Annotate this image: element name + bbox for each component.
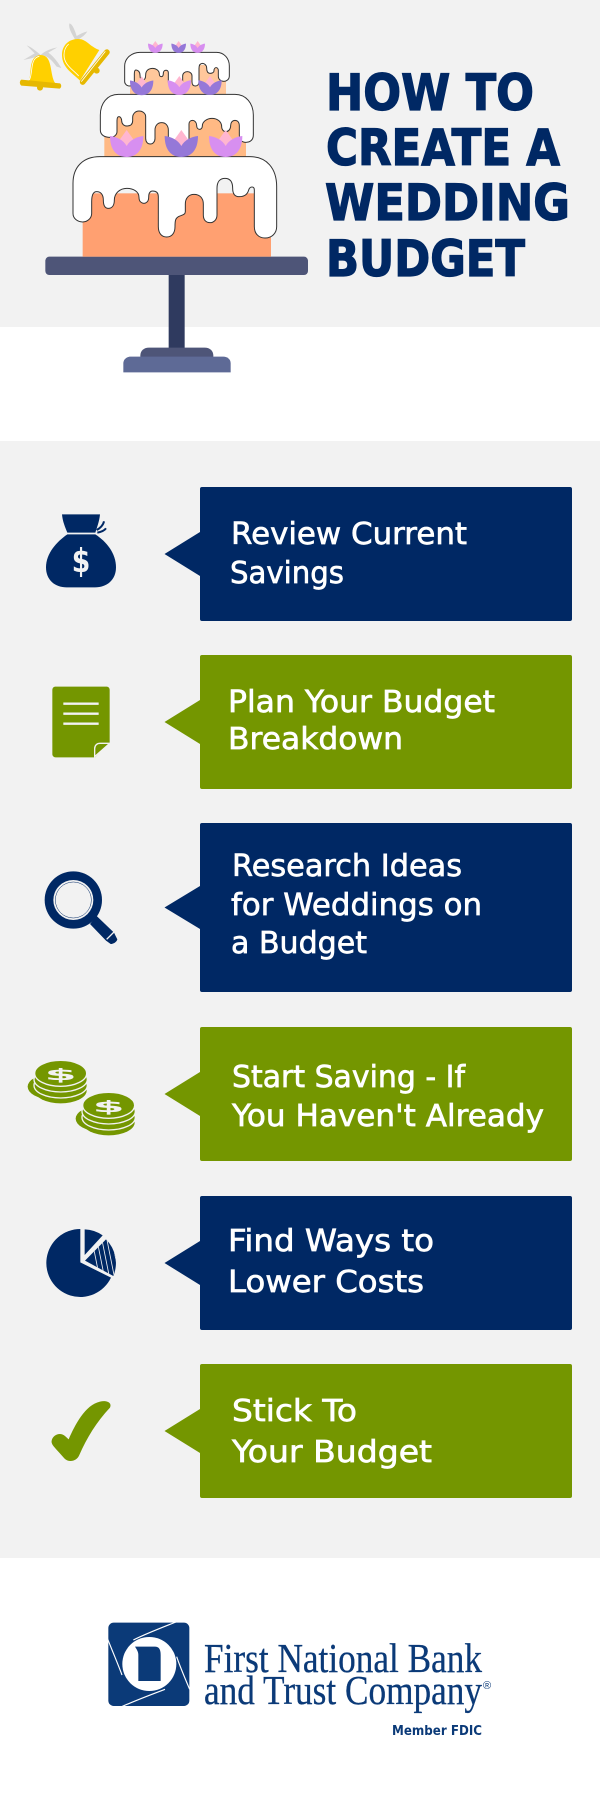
- callout text: [228, 685, 495, 757]
- flowers: bottom row: [110, 130, 242, 157]
- callout text: Stick To: [232, 1394, 357, 1429]
- coin stack 2: $: [93, 1098, 125, 1116]
- member FDIC note: Member FDIC: [392, 1724, 482, 1739]
- callout text: for Weddings on: [231, 888, 482, 923]
- panel: steps background: [0, 441, 600, 1558]
- callout text: Plan Your Budget: [228, 685, 495, 720]
- logo wordmark: [204, 1635, 491, 1713]
- callout box: [164, 1027, 572, 1161]
- icon: magnifying glass: [45, 871, 117, 944]
- logo mark: [107, 1622, 190, 1707]
- callout text: a Budget: [231, 926, 367, 961]
- logo wordmark: ®: [483, 1680, 491, 1692]
- illustration: wedding cake on stand with bells: [20, 23, 308, 372]
- step 5: find ways to lower costs: [164, 1196, 572, 1330]
- panel: header background: [0, 0, 600, 327]
- icon: document: [52, 687, 110, 757]
- step 3: research ideas: [164, 823, 572, 992]
- logo wordmark: First National Bank: [204, 1635, 482, 1681]
- icon: right bell: [62, 23, 111, 86]
- cake stand: [45, 257, 308, 372]
- cake tier: middle: [100, 94, 253, 157]
- callout box: [164, 823, 572, 992]
- title: HOW TO: [326, 64, 534, 122]
- callout box: [164, 487, 572, 621]
- icon: money bag: [46, 514, 116, 587]
- callout text: Your Budget: [231, 1435, 432, 1470]
- step 1: review current savings: [164, 487, 572, 621]
- callout text: [230, 517, 467, 591]
- title: WEDDING: [325, 174, 570, 232]
- cake tier: bottom: [73, 157, 277, 257]
- title: BUDGET: [326, 230, 525, 288]
- callout text: [231, 849, 482, 961]
- step 4: start saving: [164, 1027, 572, 1161]
- callout box: [164, 655, 572, 789]
- callout text: Find Ways to: [228, 1224, 434, 1259]
- title: [325, 64, 570, 288]
- callout text: [228, 1224, 434, 1300]
- callout text: Review Current: [231, 517, 467, 552]
- flowers: middle row: [130, 76, 222, 95]
- callout box: [164, 1196, 572, 1330]
- icon: check mark: [52, 1401, 111, 1461]
- callout text: Savings: [230, 556, 344, 591]
- icon: left bell: [20, 45, 61, 91]
- flowers: top row: [148, 41, 205, 53]
- icon: pie chart: [46, 1229, 120, 1297]
- logo: First National Bank and Trust Company: [107, 1622, 190, 1707]
- callout text: [231, 1394, 432, 1470]
- callout text: Research Ideas: [232, 849, 462, 884]
- icon: money bag: $: [72, 542, 90, 581]
- callout text: [231, 1060, 544, 1134]
- icon: coin stacks: [28, 1060, 135, 1135]
- step 6: stick to your budget: [164, 1364, 572, 1498]
- callout text: Lower Costs: [228, 1265, 424, 1300]
- step 2: plan your budget breakdown: [164, 655, 572, 789]
- coin stack 1: $: [45, 1066, 77, 1084]
- callout text: You Haven't Already: [231, 1099, 544, 1134]
- callout text: Start Saving - If: [232, 1060, 466, 1095]
- callout box: [164, 1364, 572, 1498]
- cake tier: top: [125, 52, 229, 94]
- callout text: Breakdown: [228, 722, 403, 757]
- title: CREATE A: [326, 119, 560, 177]
- logo wordmark: and Trust Company: [204, 1667, 482, 1713]
